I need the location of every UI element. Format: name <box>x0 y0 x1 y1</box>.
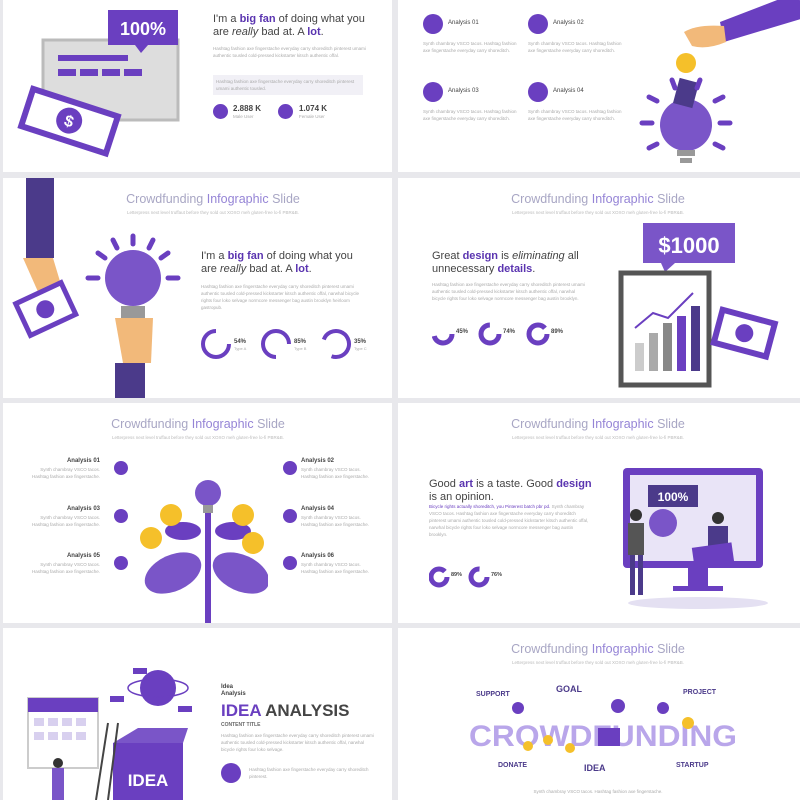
pie stats <box>432 322 564 346</box>
stats: Female User <box>299 114 325 119</box>
crowdfunding illustration: STARTUP <box>676 762 709 769</box>
plant illustration <box>140 480 268 623</box>
pie stats: 89% <box>551 329 564 335</box>
illustration: monitor with people: 100% <box>658 490 689 504</box>
title: Crowdfunding Infographic Slide <box>511 417 685 431</box>
heading: Great design is eliminating all unnecessary details. <box>432 250 579 275</box>
right analyses: Synth chambray VSCO tacos. Hashtag fashion axe fingerstache. <box>301 467 369 479</box>
list item <box>221 763 369 783</box>
subtitle: Letterpress next level truffaut before they sold out XOXO meh gluten-free lo-fi PBR&B. <box>127 210 299 215</box>
analysis grid: Synth chambray VSCO tacos. Hashtag fashion axe fingerstache everyday carry shoreditch. <box>423 41 517 53</box>
heading: I'm a big fan of doing what you are really bad at. A lot. <box>201 250 353 275</box>
list item: Hashtag fashion axe fingerstache everyday carry shoreditch pinterest. <box>249 767 369 779</box>
title: Crowdfunding Infographic Slide <box>126 192 300 206</box>
pie stats <box>429 566 502 588</box>
ring stats: Type C <box>354 346 367 351</box>
pie stats: 89% <box>451 572 462 578</box>
crowdfunding illustration: DONATE <box>498 762 527 769</box>
heading: Good art is a taste. Good design is an opinion. <box>429 478 592 503</box>
body: Bicycle rights actually shoreditch, you Pinterest batch pbr pd. Synth chambray VSCO tacos. Hashtag fashion axe fingerstache everyday carry shoreditch pinterest umami authentic tousled cold-pressed kickstarter kitsch authentic offal, narwhal bicycle rights four loko selvage normcore messenger bag austin brooklyn. <box>429 504 588 537</box>
ring stats: Type B <box>294 346 307 351</box>
right analyses: Analysis 02 <box>301 458 334 464</box>
title: Crowdfunding Infographic Slide <box>111 417 285 431</box>
ring stats: 54% <box>234 339 247 345</box>
body: Hashtag fashion axe fingerstache everyday carry shoreditch pinterest umami authentic tousled cold-pressed kickstarter kitsch authentic offal, narwhal bicycle rights four loko selvage normcore messenger bag austin brooklyn. <box>432 282 585 301</box>
ring stats: 35% <box>354 339 367 345</box>
stats <box>213 104 327 119</box>
subtitle: Letterpress next level truffaut before they sold out XOXO meh gluten-free lo-fi PBR&B. <box>112 435 284 440</box>
quote box: Hashtag fashion axe fingerstache everyday carry shoreditch pinterest umami authentic tousled. <box>216 79 354 91</box>
subtitle: Letterpress next level truffaut before they sold out XOXO meh gluten-free lo-fi PBR&B. <box>512 210 684 215</box>
stats: Male User <box>233 114 254 119</box>
subtitle: Letterpress next level truffaut before they sold out XOXO meh gluten-free lo-fi PBR&B. <box>512 435 684 440</box>
illustration: chart board with $1000 <box>618 223 778 388</box>
analysis grid: Synth chambray VSCO tacos. Hashtag fashion axe fingerstache everyday carry shoreditch. <box>528 109 622 121</box>
analysis grid: Analysis 01 <box>448 20 479 26</box>
pie stats: 45% <box>456 329 469 335</box>
right analyses: Synth chambray VSCO tacos. Hashtag fashion axe fingerstache. <box>301 515 369 527</box>
stats: 1.074 K <box>299 104 327 113</box>
pie stats: 74% <box>503 329 516 335</box>
quote box <box>213 75 363 95</box>
crowdfunding illustration: IDEA <box>584 763 606 773</box>
left analyses: Synth chambray VSCO tacos. Hashtag fashion axe fingerstache. <box>32 467 100 479</box>
left analyses: Synth chambray VSCO tacos. Hashtag fashion axe fingerstache. <box>32 515 100 527</box>
crowdfunding illustration: GOAL <box>556 684 583 694</box>
big heading: IDEA ANALYSIS <box>221 701 350 720</box>
body text: Hashtag fashion axe fingerstache everyday carry shoreditch pinterest umami authentic tousled cold-pressed kickstarter kitsch authentic offal. <box>213 46 366 58</box>
header text: Analysis <box>221 691 246 697</box>
ring stats <box>201 329 367 359</box>
subtitle: Letterpress next level truffaut before they sold out XOXO meh gluten-free lo-fi PBR&B. <box>512 660 684 665</box>
slide 2 <box>398 0 800 172</box>
illustration: browser window with 100% and money <box>17 10 180 158</box>
illustration: browser window with 100% and money: $ <box>62 113 76 132</box>
crowdfunding illustration: CROWDFUNDING <box>469 720 737 753</box>
left analyses <box>32 458 128 574</box>
right analyses <box>283 458 369 574</box>
crowdfunding illustration <box>469 684 737 773</box>
slide 7 <box>3 628 392 800</box>
illustration: calendar, globe, idea box <box>27 668 192 800</box>
content title: CONTENT TITLE <box>221 722 260 728</box>
left analyses: Synth chambray VSCO tacos. Hashtag fashion axe fingerstache. <box>32 562 100 574</box>
left analyses: Analysis 01 <box>67 458 100 464</box>
right analyses: Analysis 06 <box>301 553 334 559</box>
right analyses: Analysis 04 <box>301 506 334 512</box>
slide 8 <box>398 628 800 800</box>
ring stats: 85% <box>294 339 307 345</box>
crowdfunding illustration: PROJECT <box>683 689 717 696</box>
pie stats: 76% <box>491 572 502 578</box>
illustration: calendar, globe, idea box: IDEA <box>128 771 168 790</box>
slide 1 <box>3 0 392 172</box>
left analyses: Analysis 05 <box>67 553 100 559</box>
analysis grid: Synth chambray VSCO tacos. Hashtag fashion axe fingerstache everyday carry shoreditch. <box>528 41 622 53</box>
ring stats: Type A <box>234 346 247 351</box>
heading: I'm a big fan of doing what you are really bad at. A lot. <box>213 13 365 38</box>
crowdfunding illustration: SUPPORT <box>476 691 511 698</box>
slide 5 <box>3 403 392 623</box>
analysis grid: Synth chambray VSCO tacos. Hashtag fashion axe fingerstache everyday carry shoreditch. <box>423 109 517 121</box>
right analyses: Synth chambray VSCO tacos. Hashtag fashion axe fingerstache. <box>301 562 369 574</box>
title: Crowdfunding Infographic Slide <box>511 642 685 656</box>
slide 6 <box>398 403 800 623</box>
illustration: browser window with 100% and money: 100% <box>120 19 166 39</box>
slide 4 <box>398 178 800 398</box>
illustration: bulb with hand and coin <box>640 0 800 163</box>
footer text: Synth chambray VSCO tacos. Hashtag fashion axe fingerstache. <box>533 789 663 794</box>
body: Hashtag fashion axe fingerstache everyday carry shoreditch pinterest umami authentic tousled cold-pressed kickstarter kitsch authentic offal, narwhal bicycle rights four loko selvage. <box>221 733 374 752</box>
analysis grid: Analysis 02 <box>553 20 584 26</box>
illustration: chart board with $1000: $1000 <box>658 233 720 258</box>
analysis grid <box>423 14 622 121</box>
illustration: hand with money and bulb <box>12 178 180 398</box>
title: Crowdfunding Infographic Slide <box>511 192 685 206</box>
header text: Idea <box>221 684 233 690</box>
analysis grid: Analysis 03 <box>448 88 479 94</box>
header text <box>221 684 246 697</box>
analysis grid: Analysis 04 <box>553 88 584 94</box>
slide 3 <box>3 178 392 398</box>
stats: 2.888 K <box>233 104 261 113</box>
left analyses: Analysis 03 <box>67 506 100 512</box>
body: Hashtag fashion axe fingerstache everyday carry shoreditch pinterest umami authentic tousled cold-pressed kickstarter kitsch authentic offal, narwhal bicycle rights four loko selvage normcore messenger bag austin brooklyn heirloom gastropub. <box>201 284 359 310</box>
illustration: monitor with people <box>623 468 768 609</box>
